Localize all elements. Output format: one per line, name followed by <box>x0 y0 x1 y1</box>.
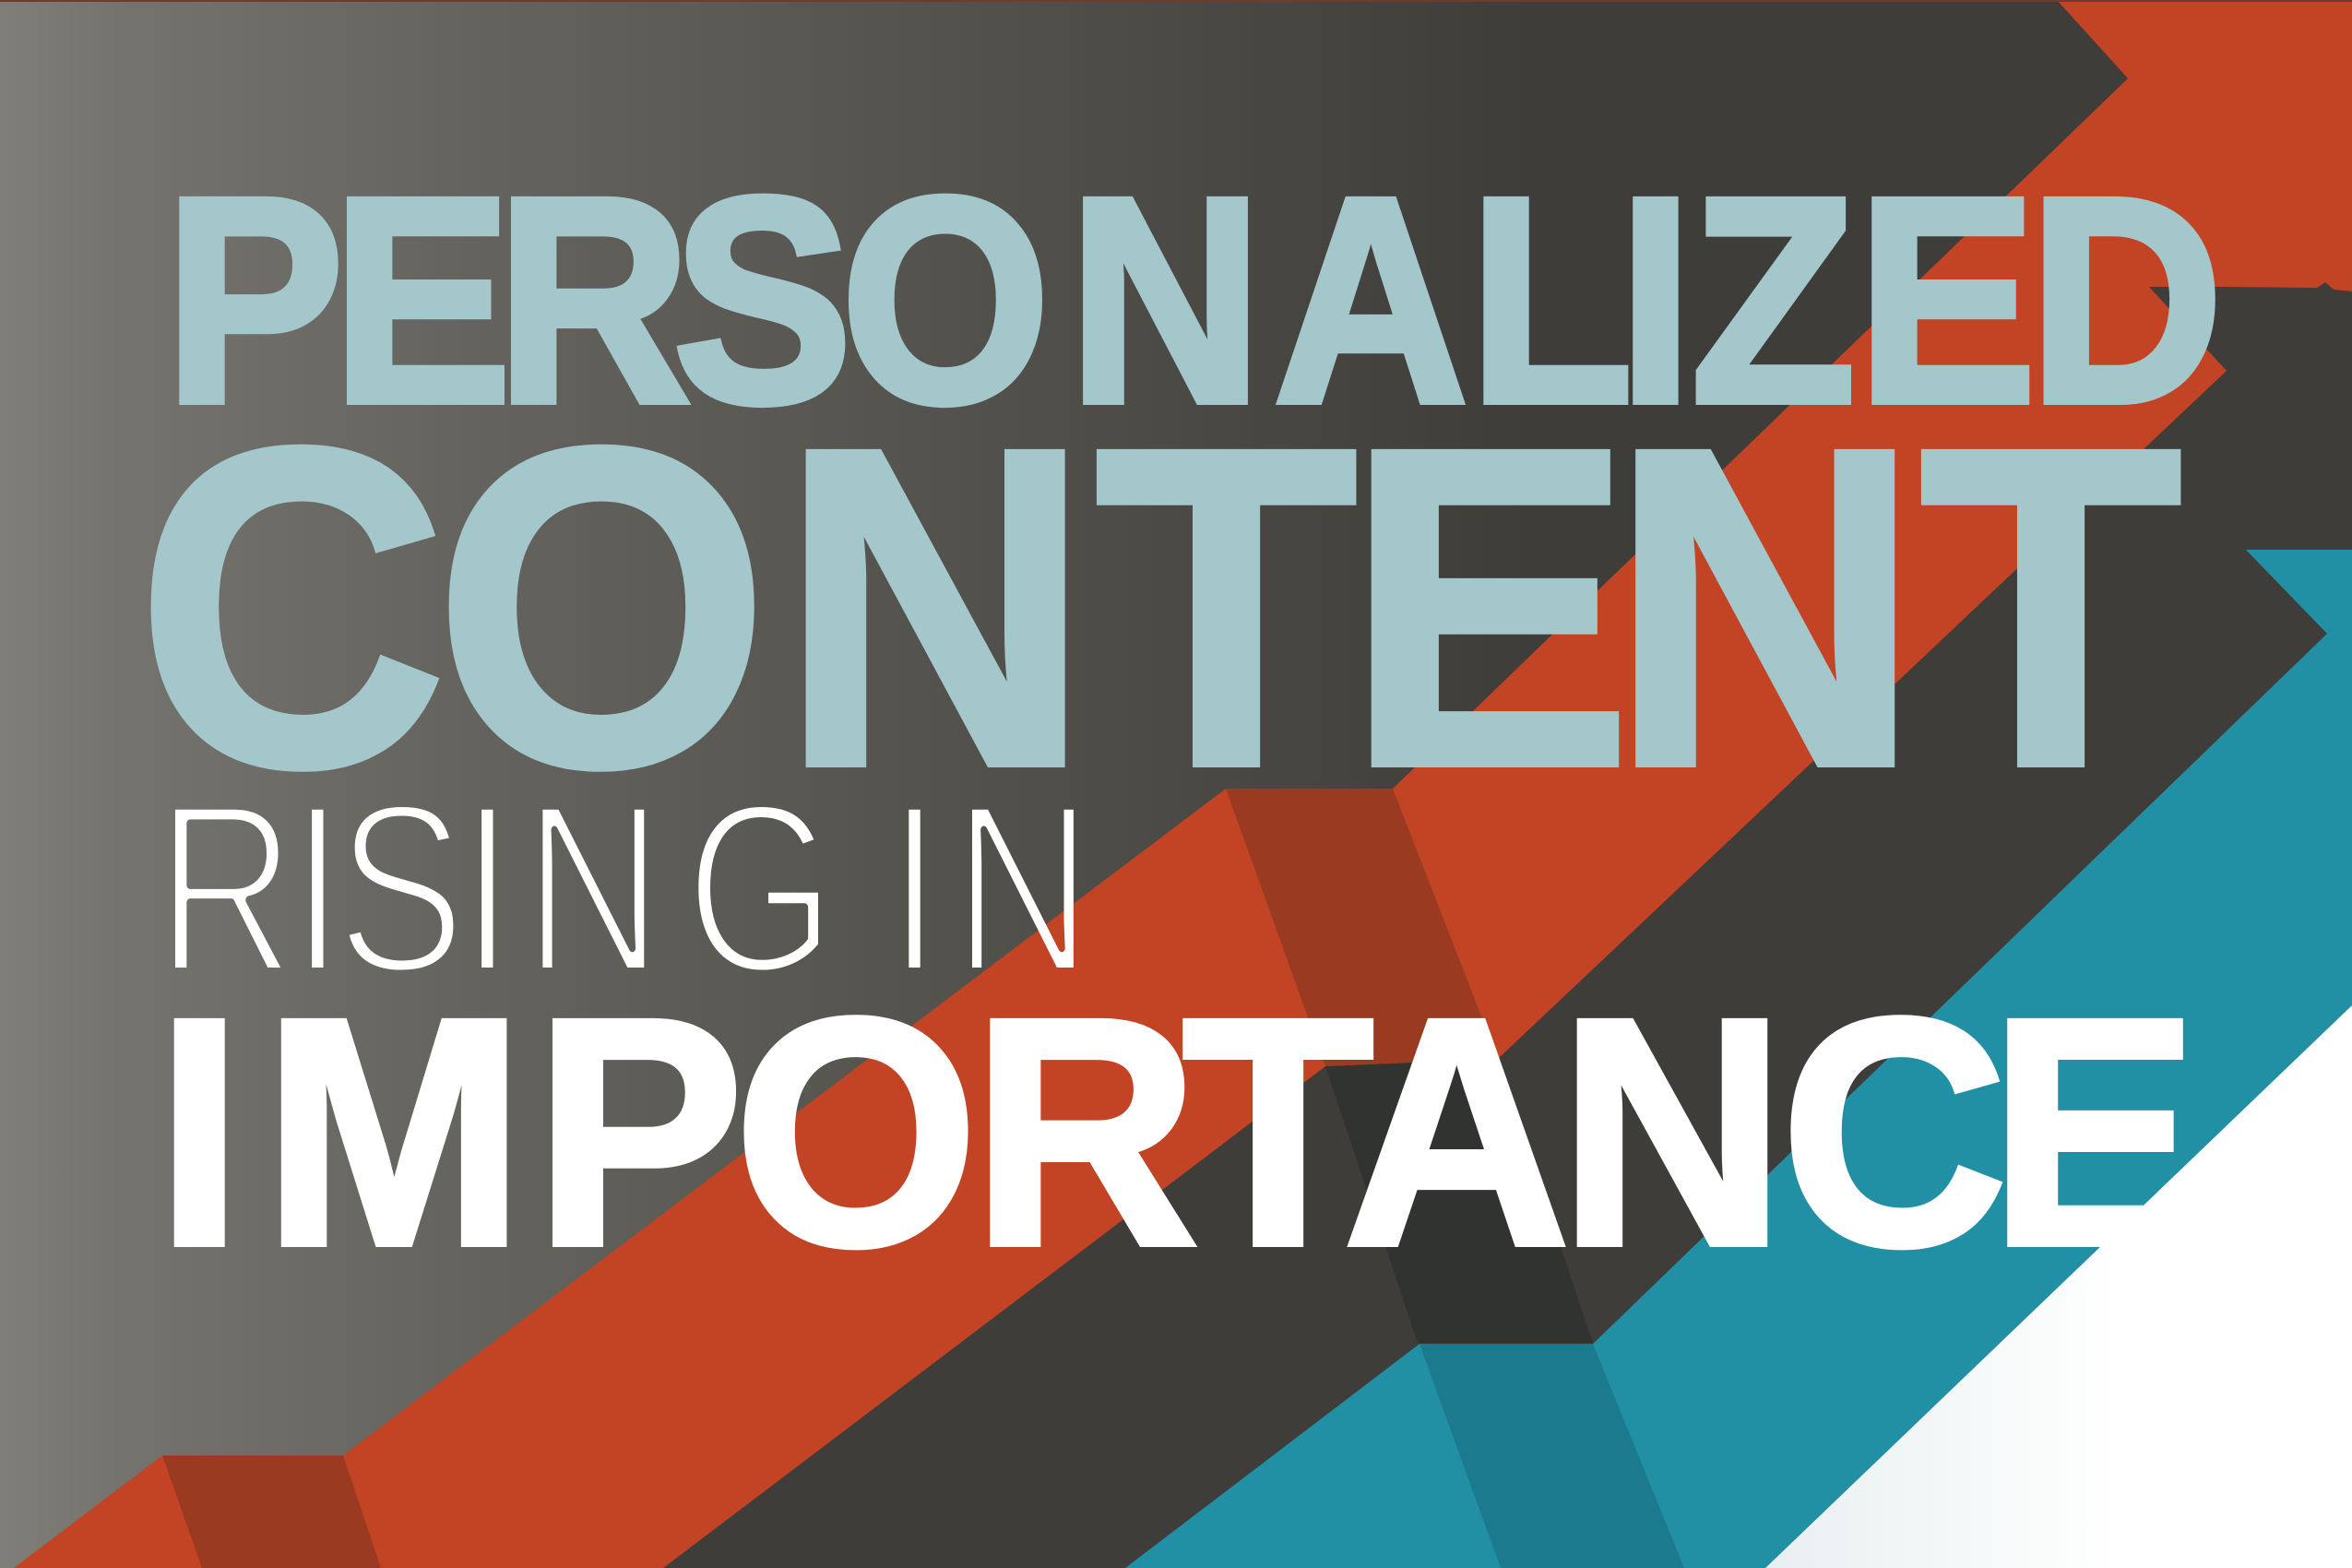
title line: importance: IMPORTANCE <box>156 951 2199 1313</box>
teal arrow band <box>1125 550 2352 1568</box>
title line: content: CONTENT <box>136 353 2183 861</box>
title line: personalized: PERSONALIZED <box>164 137 2223 464</box>
title line: rising in: RISING IN <box>156 754 1093 1024</box>
dark arrow band <box>663 287 2352 1568</box>
white corner <box>1765 1005 2352 1568</box>
